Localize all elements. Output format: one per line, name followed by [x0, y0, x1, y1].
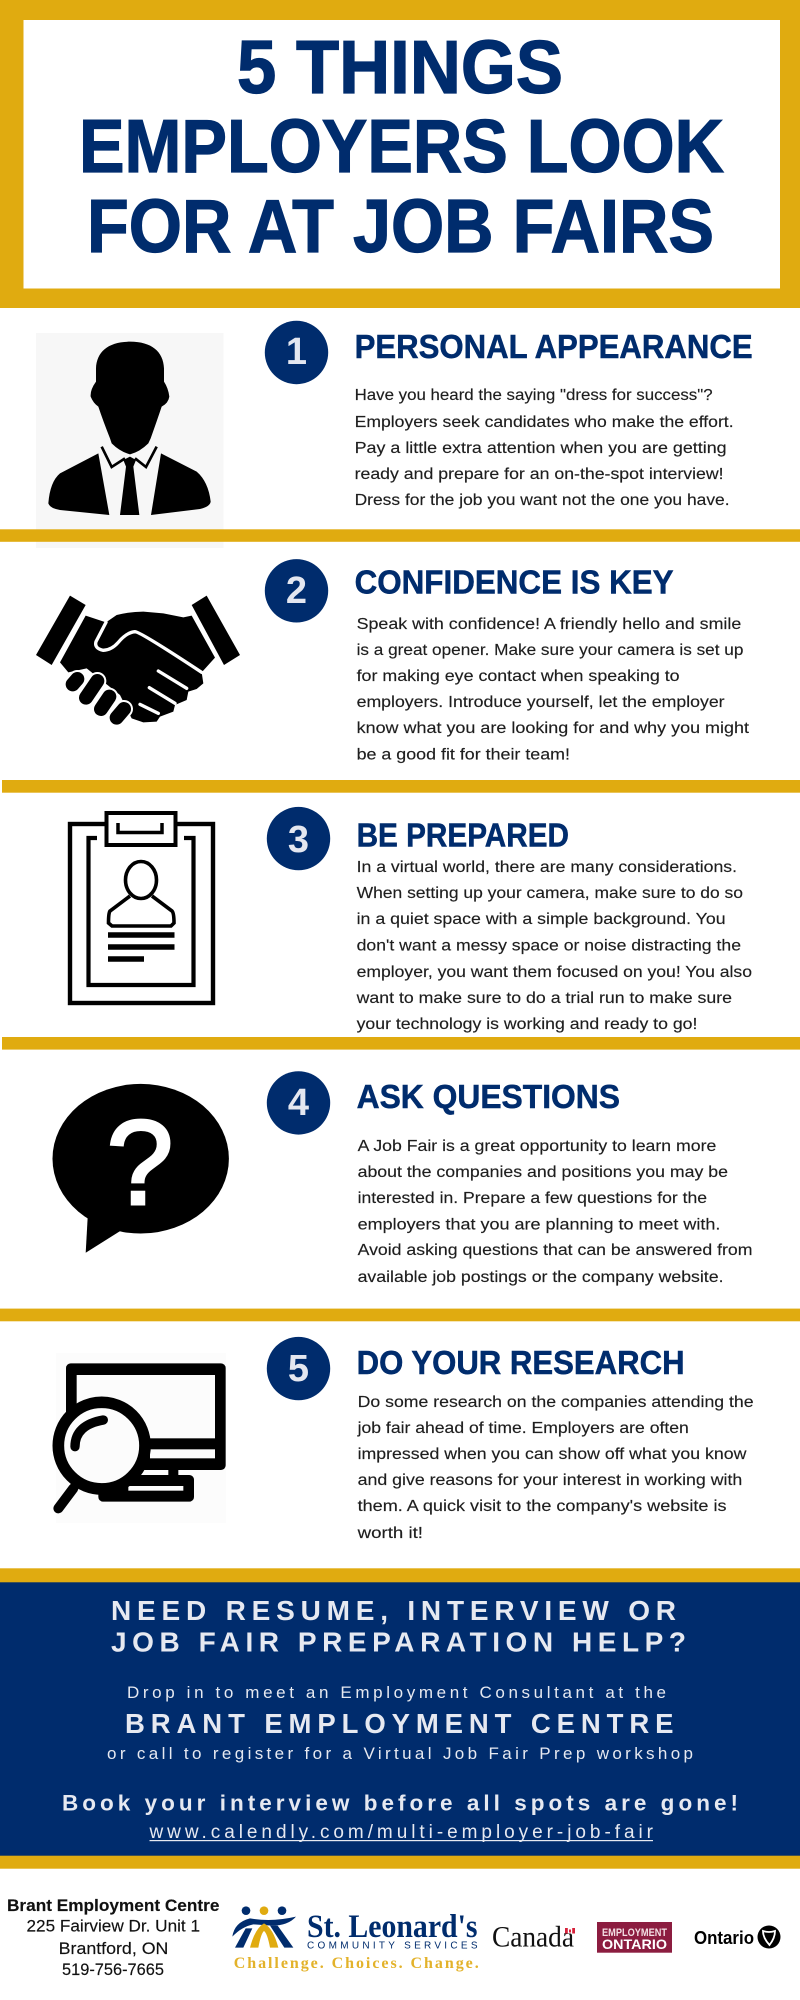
- text block: be prepared: your technology is working and ready to go!: [357, 1016, 697, 1033]
- logo: St. Leonard's Community Services: Challenge. Choices. Change.: [234, 1955, 479, 1972]
- number badge 4: 4: [288, 1082, 309, 1124]
- logo: St. Leonard's Community Services: St. Leonard's: [307, 1909, 478, 1945]
- text block: be prepared: in a quiet space with a simple background. You: [357, 911, 726, 928]
- text block: be prepared: employer, you want them focused on you! You also: [357, 964, 752, 981]
- number badge 5: [267, 1337, 330, 1400]
- title heading: EMPLOYERS LOOK: [79, 104, 724, 188]
- number badge 3: 3: [288, 819, 309, 861]
- text block: do your research: job fair ahead of time. Employers are often: [356, 1420, 689, 1437]
- icon: monitor with magnifier: [56, 1353, 226, 1523]
- icon: clipboard with resume: [70, 813, 213, 1003]
- logo: St. Leonard's Community Services: COMMUNITY SERVICES: [307, 1940, 478, 1952]
- text block: do your research: and give reasons for your interest in working with: [358, 1472, 742, 1489]
- icon: businessman silhouette: [36, 333, 224, 548]
- logo: Ontario: Ontario: [694, 1927, 754, 1948]
- cta details: or call to register for a Virtual Job Fair Prep workshop: [107, 1744, 693, 1763]
- icon: question speech bubble: [52, 1084, 229, 1253]
- text block: do your research: impressed when you can show off what you know: [358, 1446, 747, 1463]
- heading: ask questions: ASK QUESTIONS: [357, 1078, 620, 1115]
- number badge 1: 1: [286, 331, 307, 373]
- cta details: BRANT EMPLOYMENT CENTRE: [125, 1708, 674, 1739]
- heading: personal appearance: PERSONAL APPEARANCE: [355, 328, 753, 365]
- logo: Canada: Canada: [492, 1921, 574, 1954]
- text block: confidence is key: [357, 616, 750, 764]
- text block: be prepared: When setting up your camera, make sure to do so: [357, 885, 743, 902]
- number badge 5: 5: [288, 1348, 309, 1390]
- panel: confidence is key: [36, 559, 750, 764]
- logo: Employment Ontario: ONTARIO: [602, 1936, 667, 1952]
- text block: ask questions: interested in. Prepare a few questions for the: [358, 1190, 707, 1207]
- number badge 1: [265, 321, 328, 384]
- booking call to action: www.calendly.com/multi-employer-job-fair: [148, 1822, 654, 1843]
- icon: question speech bubble: ?: [107, 1096, 173, 1230]
- cta heading: JOB FAIR PREPARATION HELP?: [111, 1627, 686, 1658]
- cta heading: [111, 1595, 686, 1658]
- panel: ask questions: [52, 1071, 752, 1286]
- text block: personal appearance: [355, 387, 734, 509]
- text block: personal appearance: ready and prepare for an on-the-spot interview!: [355, 466, 724, 483]
- text block: personal appearance: Employers seek candidates who make the effort.: [355, 414, 734, 431]
- text block: personal appearance: Dress for the job you want not the one you have.: [355, 492, 730, 509]
- number badge 4: [267, 1071, 330, 1135]
- logo: Employment Ontario: [597, 1922, 672, 1953]
- panel: be prepared: [70, 807, 752, 1033]
- panel: call to action: [0, 1568, 800, 1869]
- text block: do your research: [356, 1394, 754, 1542]
- text block: personal appearance: Pay a little extra attention when you are getting: [355, 440, 727, 457]
- text block: do your research: Do some research on the companies attending the: [358, 1394, 754, 1411]
- footer address: 225 Fairview Dr. Unit 1: [26, 1918, 200, 1936]
- text block: ask questions: Avoid asking questions that can be answered from: [358, 1242, 752, 1259]
- icon: handshake: [36, 596, 240, 722]
- number badge 3: [267, 807, 330, 870]
- text block: be prepared: don't want a messy space or noise distracting the: [357, 937, 741, 954]
- booking call to action: Book your interview before all spots are gone!: [62, 1791, 738, 1816]
- text block: ask questions: available job postings or the company website.: [358, 1269, 724, 1286]
- number badge 2: 2: [286, 570, 307, 612]
- text block: be prepared: [355, 859, 752, 1033]
- text block: do your research: them. A quick visit to the company's website is: [358, 1498, 727, 1515]
- footer address: Brantford, ON: [59, 1940, 168, 1958]
- footer address: 519-756-7665: [62, 1961, 164, 1979]
- text block: ask questions: [358, 1138, 752, 1286]
- logo: Employment Ontario: EMPLOYMENT: [602, 1927, 667, 1939]
- title heading: 5 THINGS: [237, 25, 563, 109]
- cta details: [107, 1683, 693, 1763]
- heading: confidence is key: CONFIDENCE IS KEY: [355, 563, 674, 600]
- cta details: Drop in to meet an Employment Consultant at the: [127, 1683, 666, 1702]
- cta heading: NEED RESUME, INTERVIEW OR: [111, 1595, 676, 1626]
- text block: be prepared: In a virtual world, there are many considerations.: [357, 859, 737, 876]
- number badge 2: [265, 559, 328, 622]
- text block: ask questions: employers that you are planning to meet with.: [358, 1216, 720, 1233]
- text block: confidence is key: is a great opener. Make sure your camera is set up: [357, 642, 744, 659]
- booking call to action: [62, 1791, 738, 1843]
- title heading: [79, 25, 724, 268]
- logo: St. Leonard's Community Services: [232, 1906, 479, 1972]
- logo: Ontario: [694, 1926, 780, 1948]
- text block: confidence is key: know what you are looking for and why you might: [357, 720, 750, 737]
- footer address: Brant Employment Centre: [7, 1897, 219, 1915]
- text block: confidence is key: for making eye contact when speaking to: [357, 668, 680, 685]
- heading: be prepared: BE PREPARED: [357, 816, 569, 853]
- text block: confidence is key: be a good fit for their team!: [357, 747, 570, 764]
- text block: ask questions: A Job Fair is a great opportunity to learn more: [358, 1138, 716, 1155]
- title heading: FOR AT JOB FAIRS: [87, 184, 714, 268]
- icon: St. Leonard's people: [232, 1906, 296, 1948]
- heading: do your research: DO YOUR RESEARCH: [357, 1344, 685, 1381]
- panel: do your research: [56, 1337, 754, 1542]
- title panel: [0, 0, 800, 308]
- text block: confidence is key: employers. Introduce yourself, let the employer: [357, 694, 725, 711]
- footer address: [7, 1897, 219, 1979]
- panel: personal appearance: [36, 321, 753, 548]
- text block: personal appearance: Have you heard the saying "dress for success"?: [355, 387, 713, 404]
- text block: be prepared: want to make sure to do a trial run to make sure: [355, 990, 732, 1007]
- text block: ask questions: about the companies and positions you may be: [358, 1164, 728, 1181]
- text block: do your research: worth it!: [356, 1525, 423, 1542]
- text block: confidence is key: Speak with confidence! A friendly hello and smile: [357, 616, 741, 633]
